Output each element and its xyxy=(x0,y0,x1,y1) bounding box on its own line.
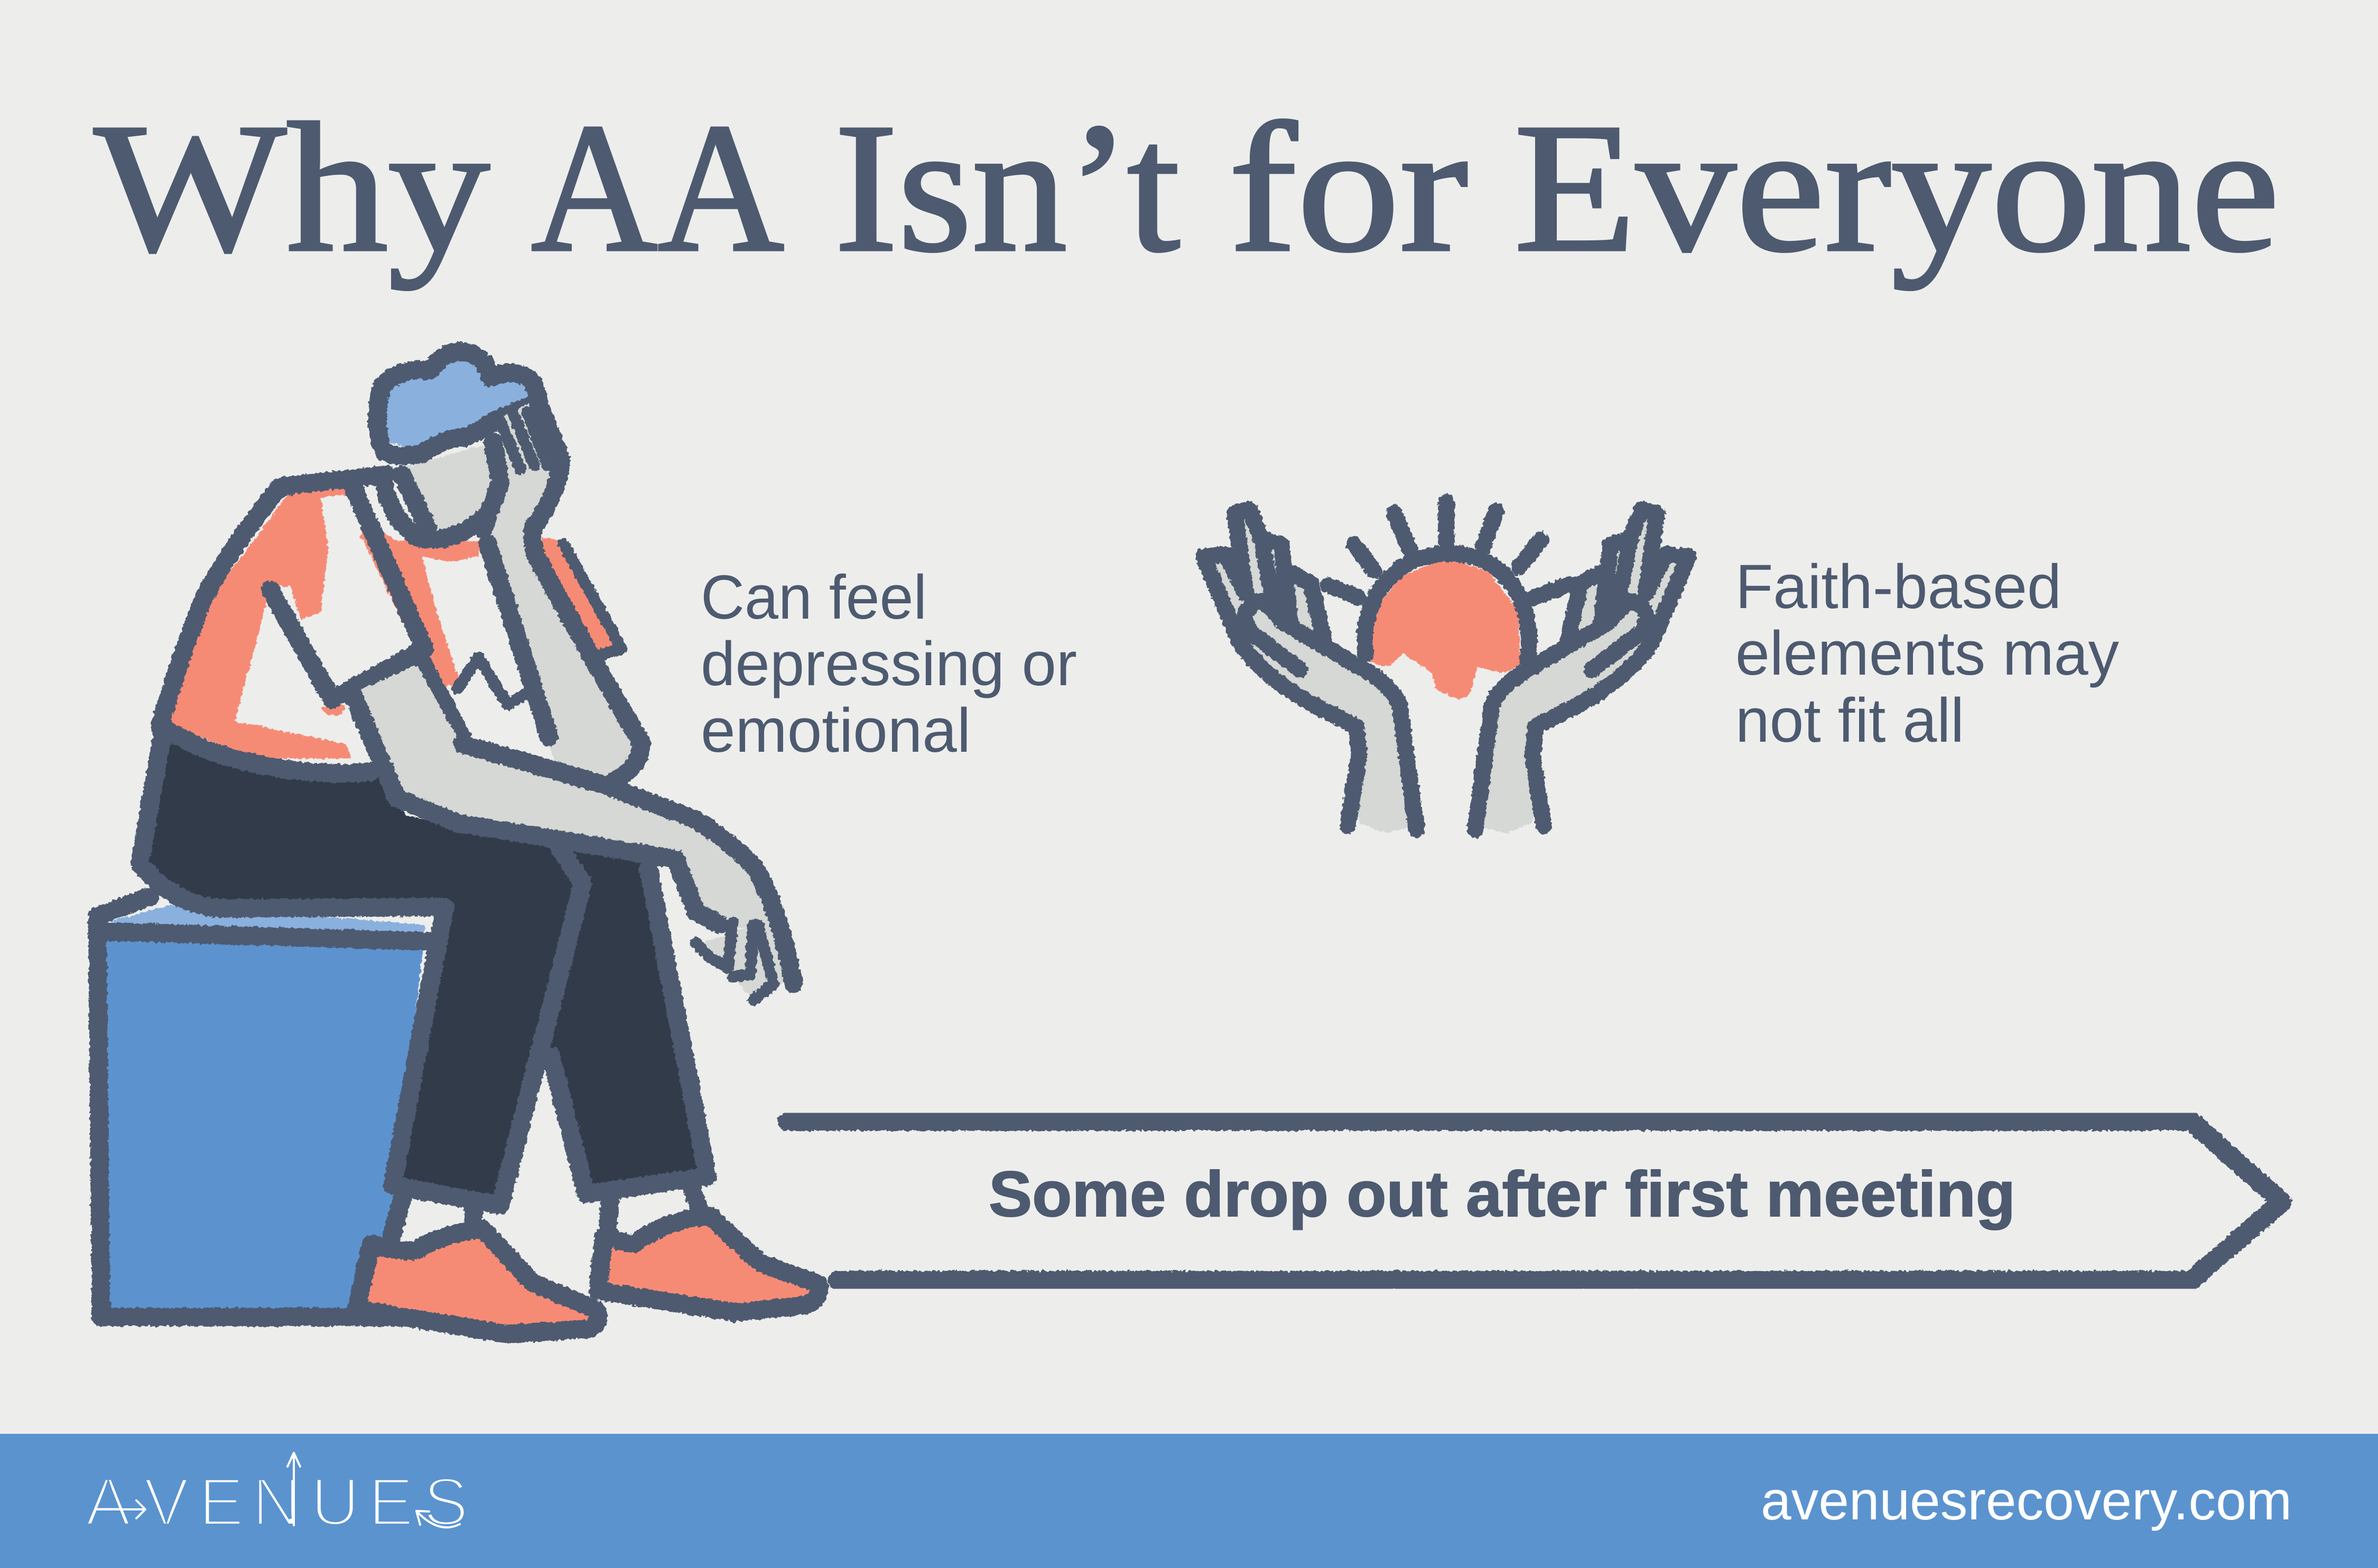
logo: avenues: AVENUES xyxy=(86,1464,468,1540)
face and neck xyxy=(384,445,500,539)
footer bar xyxy=(0,1434,2378,1568)
text: faith-based elements: elements may xyxy=(1735,619,2119,688)
shoes xyxy=(356,1184,819,1334)
text: can feel depressing: depressing or xyxy=(701,629,1077,699)
left hand xyxy=(1203,509,1418,833)
arrow banner outline xyxy=(787,1121,2282,1281)
title: for xyxy=(1229,85,1468,290)
title: Everyone xyxy=(1514,85,2280,291)
text: faith-based elements: not fit all xyxy=(1735,686,1964,755)
title xyxy=(94,85,2280,291)
lowered arm and hand xyxy=(352,665,794,1000)
text: can feel depressing: emotional xyxy=(701,696,971,766)
text: faith-based elements xyxy=(1735,552,2119,755)
right hand xyxy=(1473,509,1688,833)
footer url: avenuesrecovery.com xyxy=(1761,1470,2292,1532)
text: faith-based elements: Faith-based xyxy=(1735,552,2061,622)
text: can feel depressing xyxy=(701,563,1077,766)
box xyxy=(97,897,427,1317)
title: Why xyxy=(94,85,490,291)
shirt xyxy=(160,474,621,773)
dark trousers xyxy=(140,731,708,1205)
icon: hands holding sun xyxy=(1203,502,1688,833)
illustration: seated man on box xyxy=(97,352,819,1334)
text: arrow label: Some drop out after first meeting xyxy=(989,1158,2015,1230)
title: Isn’t xyxy=(834,85,1181,290)
text: can feel depressing: Can feel xyxy=(701,563,927,632)
hair xyxy=(377,352,539,455)
sun rays xyxy=(1329,502,1571,598)
sun xyxy=(1359,554,1529,700)
raised arm and hand xyxy=(484,403,642,787)
title: AA xyxy=(531,85,784,290)
